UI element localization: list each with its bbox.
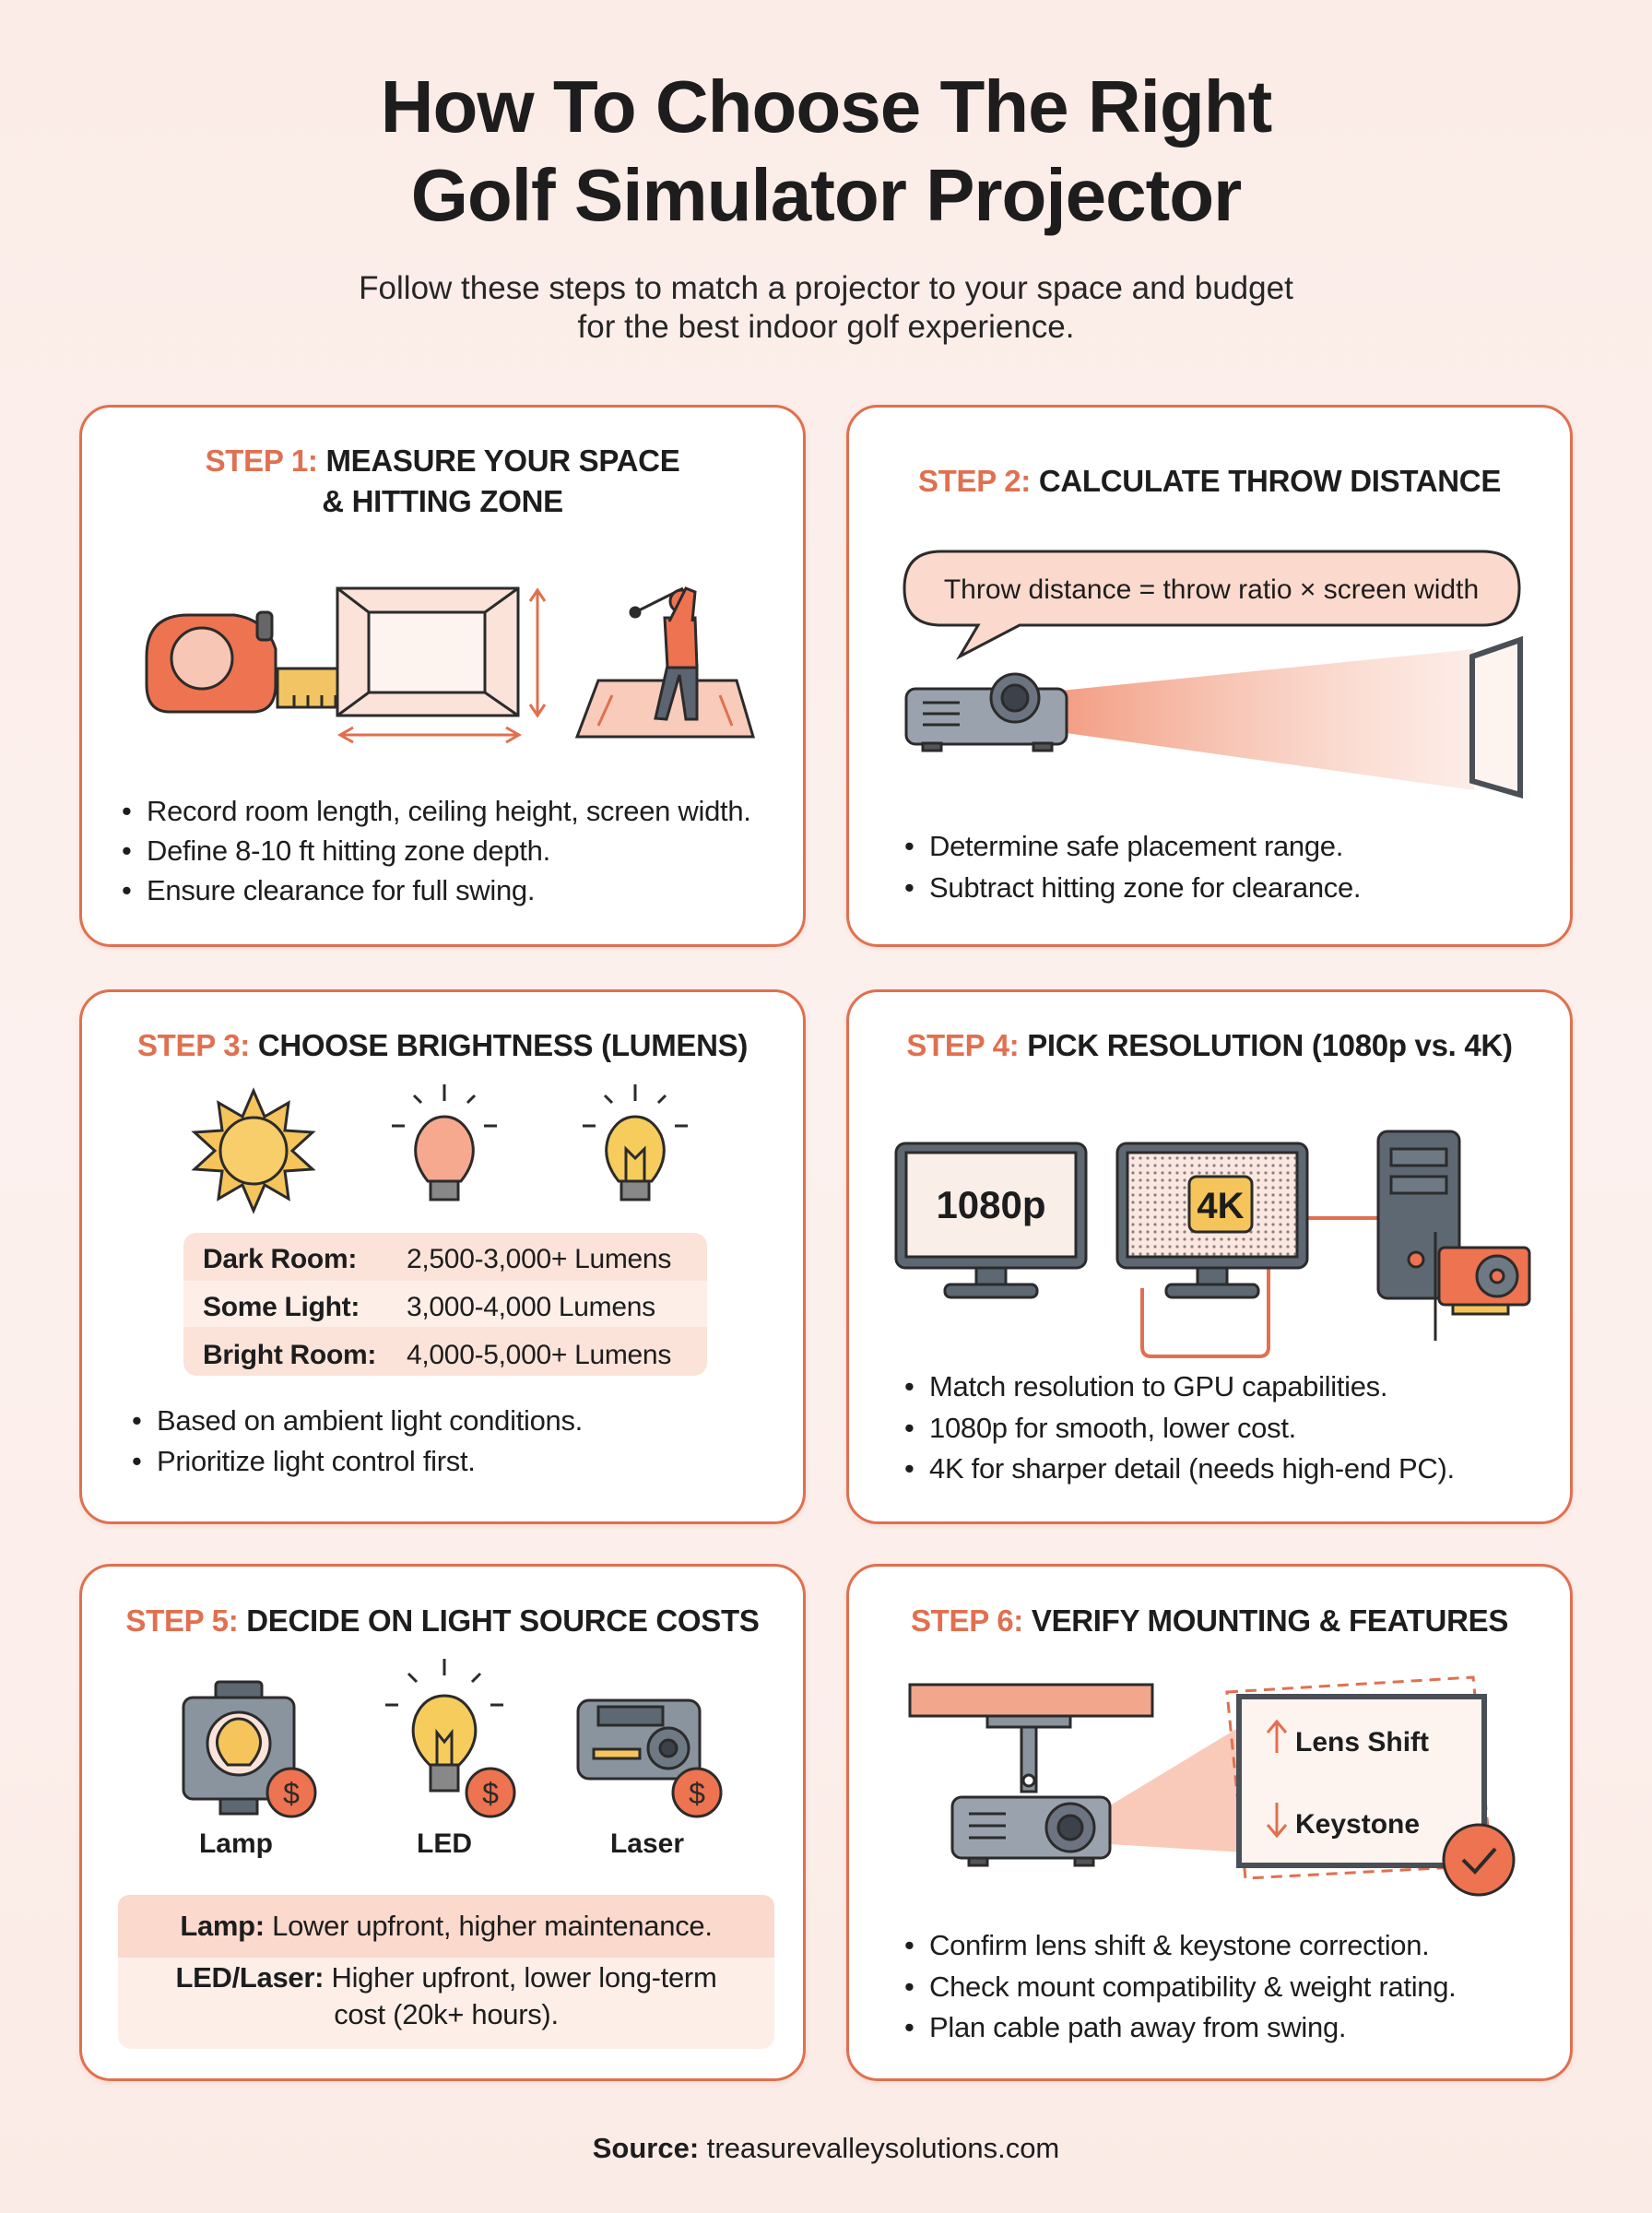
heading step 1 [206, 444, 679, 518]
icon: wall screen [1472, 640, 1520, 795]
panel: step 6: • [904, 2011, 914, 2043]
bullets step 2: Determine safe placement range. [929, 830, 1343, 862]
icon: bright bulb [583, 1084, 688, 1200]
panel: step 1 [79, 405, 806, 947]
icon: 1080p monitor: 1080p [936, 1183, 1046, 1226]
panel: step 5 [79, 1564, 806, 2081]
bullets step 1: Record room length, ceiling height, screen width. [147, 795, 751, 827]
panel: step 5: Laser [610, 1828, 684, 1859]
cost text: Lamp: Lower upfront, higher maintenance. [180, 1910, 713, 1942]
ceiling mount [987, 1716, 1070, 1792]
icon labels: Lamp [199, 1828, 273, 1859]
icon: LED: $ [482, 1777, 499, 1810]
heading step 1: STEP 1: MEASURE YOUR SPACE [206, 444, 679, 478]
heading step 1: & HITTING ZONE [322, 484, 563, 518]
panel: step 2: Subtract hitting zone for clearance. [929, 871, 1361, 904]
panel: step 6: Lens Shift [1295, 1727, 1429, 1757]
panel: step 1: • [122, 874, 132, 906]
panel: step 4: • [904, 1370, 914, 1402]
heading step 2: STEP 2: CALCULATE THROW DISTANCE [918, 464, 1501, 498]
icon: projector [906, 674, 1067, 751]
panel: step 4: 4K for sharper detail (needs high-end PC). [929, 1452, 1455, 1485]
icon: sun [195, 1091, 313, 1211]
icon: screen frame [337, 588, 518, 716]
panel: step 4: • [904, 1412, 914, 1444]
bullets step 4: Match resolution to GPU capabilities. [929, 1370, 1387, 1402]
panel: step 6: Plan cable path away from swing. [929, 2011, 1346, 2043]
icon: dim bulb [392, 1084, 497, 1200]
panel: step 1: Ensure clearance for full swing. [147, 874, 535, 906]
bullets step 3: Based on ambient light conditions. [157, 1404, 583, 1437]
panel: step 2 [846, 405, 1573, 947]
lumens table text: 2,500-3,000+ Lumens [407, 1244, 671, 1274]
lumens table text: Bright Room: [203, 1340, 376, 1370]
icon: lamp: $ [283, 1777, 300, 1810]
panel: step 3: • [132, 1445, 142, 1477]
panel: step 4 [846, 989, 1573, 1524]
lumens table [183, 1233, 707, 1376]
panel: step 1: • [122, 834, 132, 867]
subtitle: for the best indoor golf experience. [578, 309, 1074, 345]
panel: step 3 [79, 989, 806, 1524]
icon: golfer on mat [577, 588, 753, 737]
bullets step 6: Confirm lens shift & keystone correction. [929, 1929, 1429, 1961]
panel: step 4: 1080p for smooth, lower cost. [929, 1412, 1296, 1444]
icon: 4K monitor [1117, 1143, 1307, 1297]
heading step 5: STEP 5: DECIDE ON LIGHT SOURCE COSTS [125, 1604, 760, 1638]
ceiling beam [910, 1685, 1152, 1716]
subtitle: Follow these steps to match a projector to your space and budget [359, 270, 1293, 306]
panel: step 4: • [904, 1452, 914, 1485]
screen with lens shift / keystone [1227, 1677, 1492, 1878]
panel: step 2: • [904, 830, 914, 862]
panel: step 6 [846, 1564, 1573, 2081]
icon: laser: $ [689, 1777, 705, 1810]
icon: lamp [183, 1682, 315, 1817]
arrows [340, 590, 545, 742]
title: Golf Simulator Projector [411, 154, 1241, 236]
cost box [118, 1895, 774, 2049]
formula bubble: Throw distance = throw ratio × screen width [944, 574, 1479, 605]
icon: check [1444, 1825, 1514, 1895]
formula bubble [903, 550, 1523, 799]
panel: step 5: cost (20k+ hours). [334, 1998, 559, 2030]
panel: step 6: Keystone [1295, 1809, 1420, 1840]
subtitle [359, 270, 1293, 345]
lumens table text: 4,000-5,000+ Lumens [407, 1340, 671, 1370]
panel: step 5: LED [417, 1828, 472, 1859]
icons step 1 [146, 586, 755, 743]
heading step 3: STEP 3: CHOOSE BRIGHTNESS (LUMENS) [137, 1028, 748, 1062]
panel: step 6: • [904, 1929, 914, 1961]
panel: step 6: • [904, 1970, 914, 2003]
panel: step 1: Define 8-10 ft hitting zone depth. [147, 834, 550, 867]
lumens table text: Dark Room: [203, 1244, 357, 1274]
heading step 4: STEP 4: PICK RESOLUTION (1080p vs. 4K) [906, 1028, 1513, 1062]
icon: laser [578, 1700, 721, 1817]
icon: LED [385, 1659, 514, 1817]
lumens table text [203, 1244, 671, 1370]
title [381, 65, 1272, 236]
icon: 4K monitor: 4K [1197, 1186, 1245, 1226]
icon: tape measure [147, 612, 375, 713]
panel: step 6: Check mount compatibility & weight rating. [929, 1970, 1457, 2003]
heading step 6: STEP 6: VERIFY MOUNTING & FEATURES [911, 1604, 1508, 1638]
lumens table text: 3,000-4,000 Lumens [407, 1292, 655, 1322]
title: How To Choose The Right [381, 65, 1271, 148]
lumens table text: Some Light: [203, 1292, 360, 1322]
panel: step 2: • [904, 871, 914, 904]
panel: step 3: Prioritize light control first. [157, 1445, 476, 1477]
panel: step 5: LED/Laser: Higher upfront, lower long-term [175, 1961, 716, 1994]
panel: step 1: • [122, 795, 132, 827]
cable [1142, 1218, 1379, 1356]
source: Source: treasurevalleysolutions.com [593, 2132, 1059, 2164]
icon: PC tower with GPU [1378, 1131, 1529, 1341]
icon: projector [952, 1797, 1110, 1865]
beam light [1093, 1723, 1245, 1852]
icon: 1080p monitor [896, 1143, 1086, 1297]
panel: step 3: • [132, 1404, 142, 1437]
